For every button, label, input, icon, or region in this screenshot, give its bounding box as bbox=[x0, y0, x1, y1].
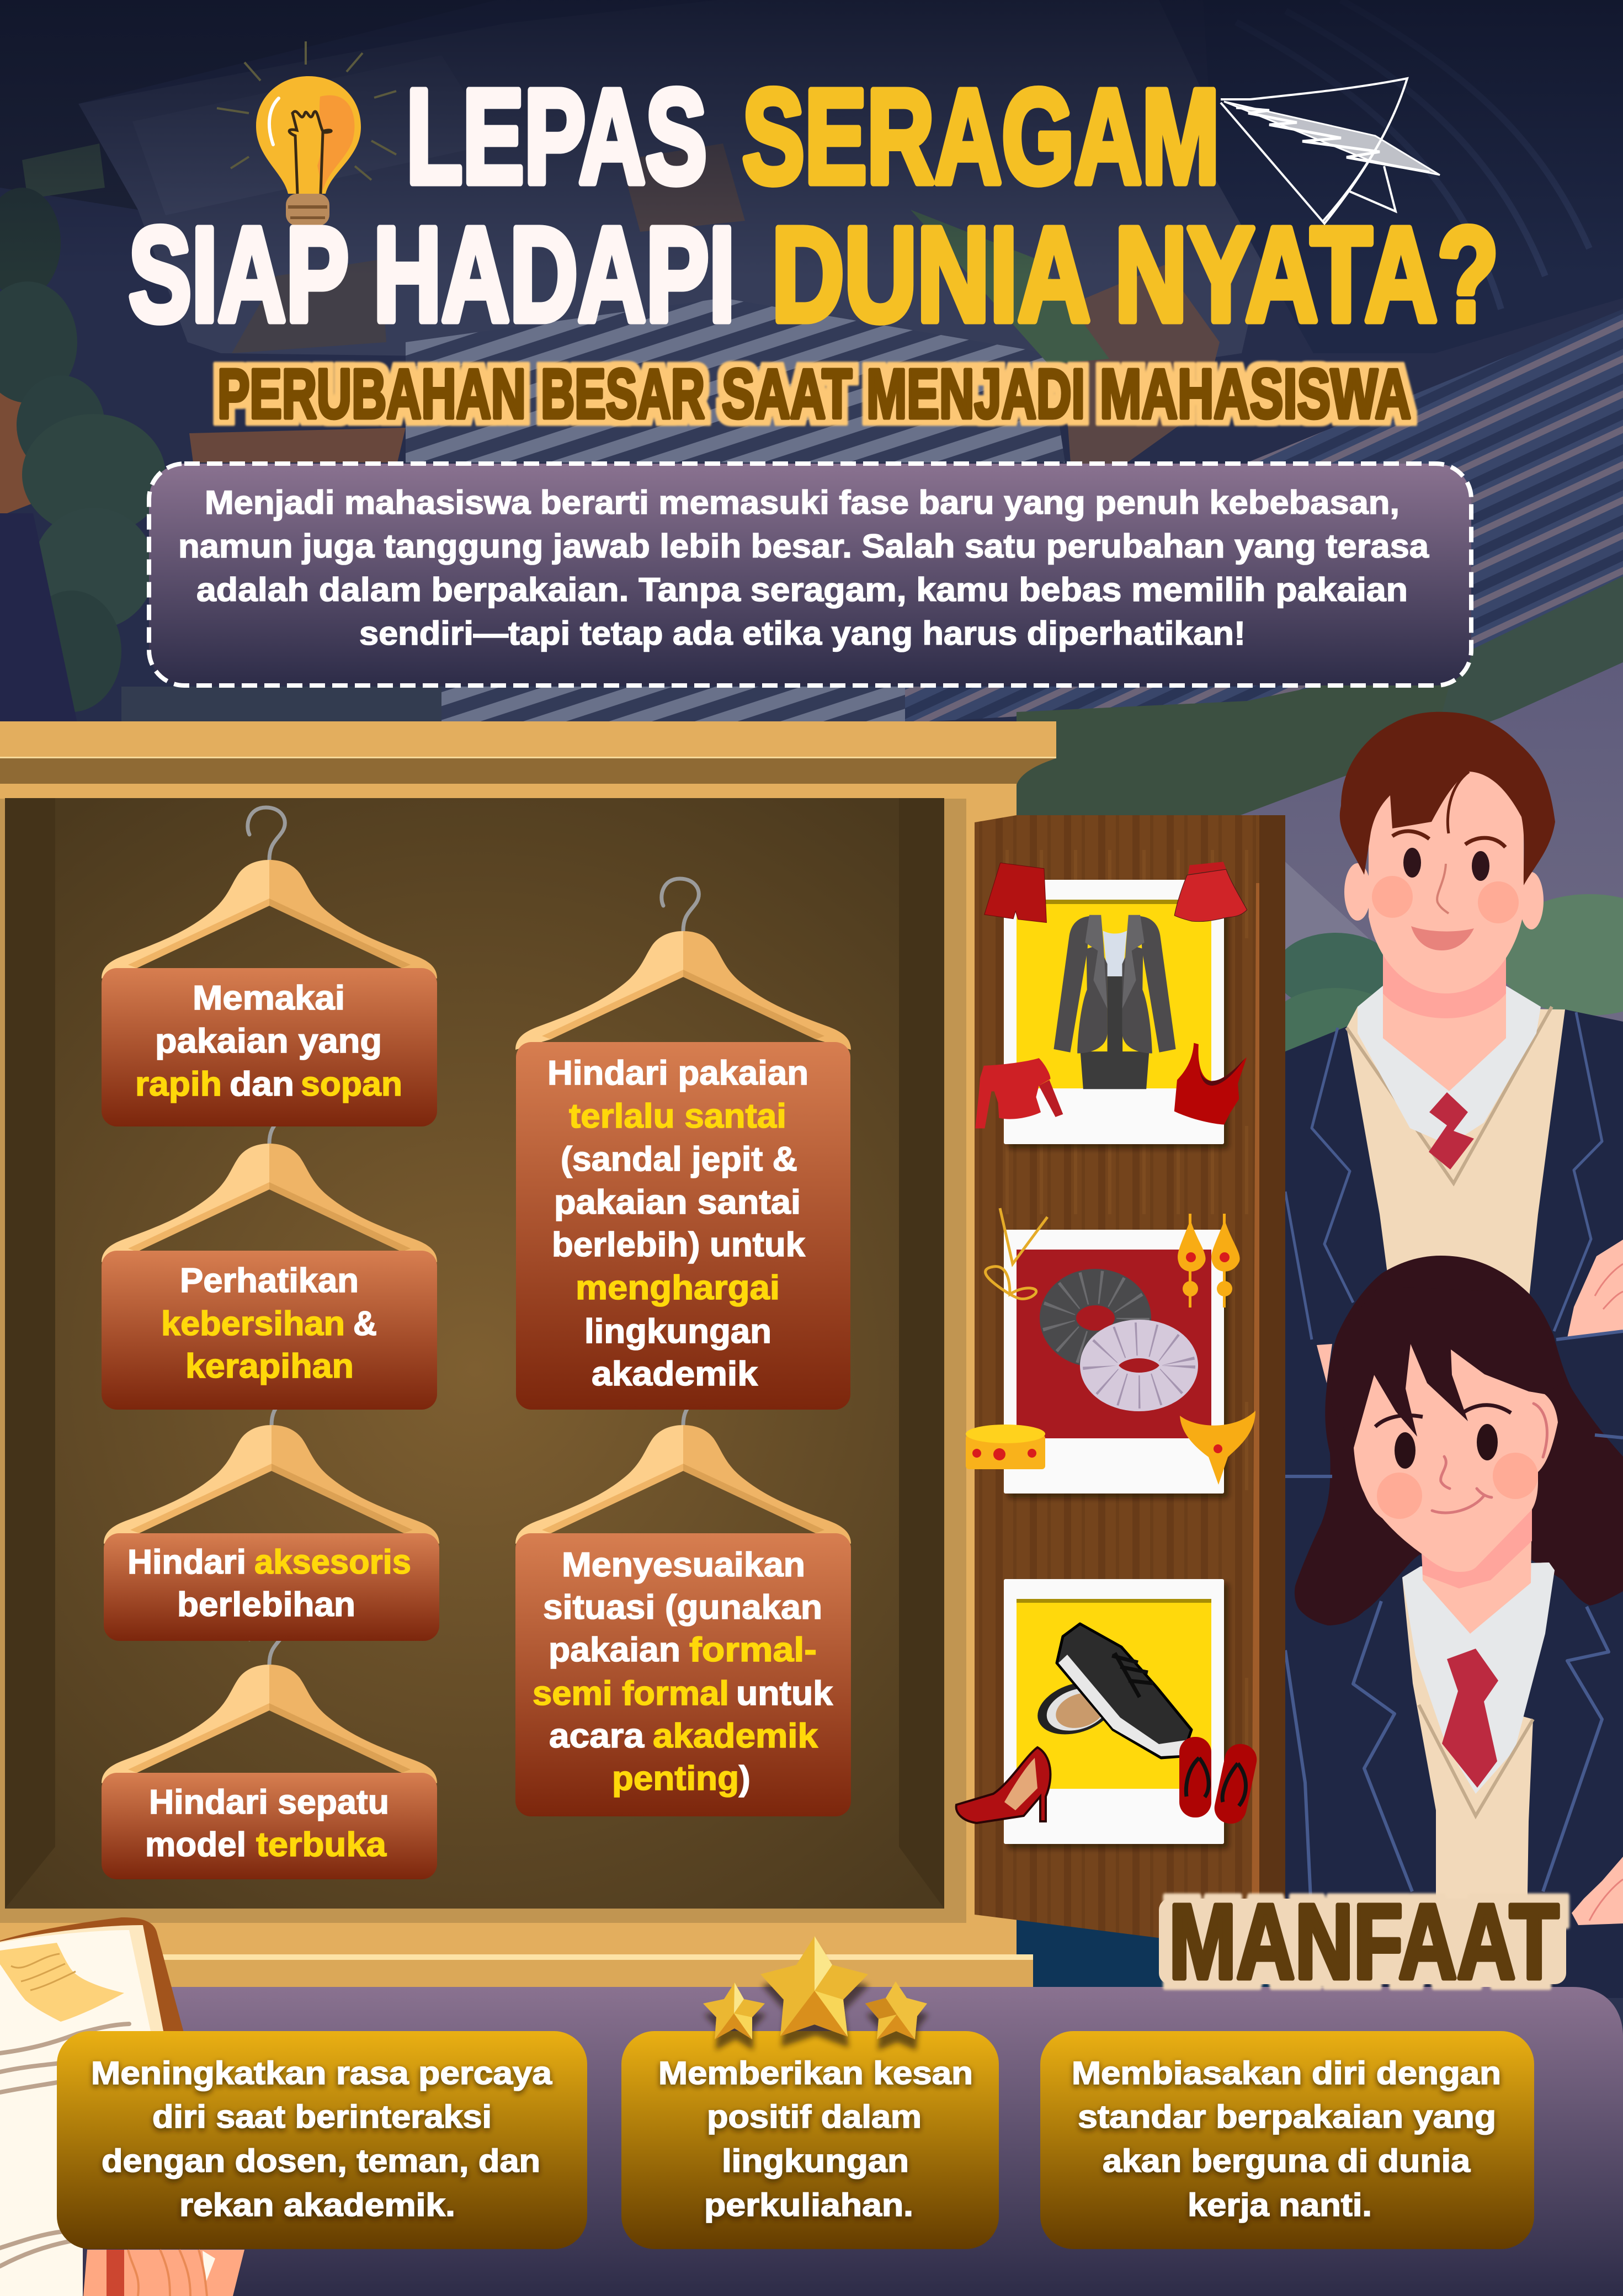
hanger sign: Hindari aksesoris berlebihan bbox=[104, 1373, 439, 1641]
panel: intro paragraph bbox=[149, 464, 1471, 685]
panel: intro paragraph: Menjadi mahasiswa berarti memasuki fase baru yang penuh kebebasan, bbox=[205, 484, 1399, 521]
girl student bbox=[1285, 1256, 1623, 1998]
boy student bbox=[1285, 712, 1623, 1998]
hanger sign: Hindari aksesoris berlebihan: aksesoris bbox=[254, 1543, 411, 1581]
polaroid: outfits bbox=[975, 862, 1247, 1144]
card: kesan positif bbox=[621, 2031, 999, 2249]
hanger sign: Hindari pakaian terlalu santai: terlalu santai bbox=[569, 1097, 786, 1135]
icon: open book and hand bbox=[0, 1917, 244, 2296]
hanger sign: Memakai pakaian yang rapih dan sopan: dan bbox=[230, 1065, 294, 1103]
hanger sign: Menyesuaikan situasi bbox=[515, 1373, 851, 1816]
icon: gold collar necklace bbox=[1180, 1411, 1255, 1485]
hanger sign: Menyesuaikan situasi: untuk bbox=[736, 1675, 833, 1713]
card: standar dunia kerja: akan berguna di dunia bbox=[1103, 2143, 1471, 2179]
icon: lilac scrunchie bbox=[1099, 1339, 1179, 1392]
subtitle: MENJADI bbox=[866, 355, 1085, 433]
card: kesan positif: perkuliahan. bbox=[704, 2187, 913, 2223]
hanger sign: Memakai pakaian yang rapih dan sopan: Memakai bbox=[193, 979, 345, 1017]
icon: grey scrunchie bbox=[1058, 1287, 1133, 1349]
card: percaya diri: Meningkatkan rasa percaya bbox=[91, 2055, 552, 2091]
hanger sign: Hindari pakaian terlalu santai: akademik bbox=[592, 1355, 758, 1393]
hanger sign: Perhatikan kebersihan dan kerapihan: & bbox=[353, 1305, 377, 1343]
subtitle: PERUBAHAN bbox=[217, 355, 526, 433]
hanger sign: Hindari pakaian terlalu santai: (sandal jepit & bbox=[561, 1140, 797, 1178]
hanger sign: Hindari pakaian terlalu santai: Hindari pakaian bbox=[547, 1054, 808, 1092]
hanger sign: Memakai pakaian yang rapih dan sopan: rapih bbox=[135, 1065, 222, 1103]
subtitle: BESAR bbox=[541, 355, 705, 433]
icon: three gold stars bbox=[703, 1936, 927, 2039]
hanger sign: Perhatikan kebersihan dan kerapihan bbox=[102, 1091, 437, 1410]
icon: red shorts bbox=[985, 863, 1046, 923]
subtitle: SAAT bbox=[722, 355, 852, 433]
polaroid: footwear bbox=[956, 1579, 1260, 1844]
hanger sign: Hindari pakaian terlalu santai: lingkungan bbox=[584, 1312, 771, 1351]
hanger sign: Perhatikan kebersihan dan kerapihan: Perhatikan bbox=[180, 1262, 359, 1300]
hanger sign: Perhatikan kebersihan dan kerapihan: kebersihan bbox=[161, 1305, 345, 1343]
icon: light bulb bbox=[217, 41, 396, 226]
hanger sign: Menyesuaikan situasi: situasi (gunakan bbox=[543, 1588, 822, 1627]
card: kesan positif: Memberikan kesan bbox=[658, 2055, 973, 2091]
panel: benefits background bbox=[0, 1987, 1623, 2296]
icon: red off-shoulder top bbox=[975, 1058, 1063, 1129]
hanger sign: Hindari pakaian terlalu santai bbox=[515, 879, 851, 1410]
hanger sign: Menyesuaikan situasi: pakaian bbox=[549, 1631, 680, 1669]
hanger sign: Menyesuaikan situasi: ) bbox=[739, 1760, 751, 1798]
hanger sign: Hindari aksesoris berlebihan: Hindari bbox=[127, 1543, 246, 1581]
wardrobe frame bbox=[0, 721, 1287, 1993]
hanger sign: Hindari aksesoris berlebihan: berlebihan bbox=[177, 1586, 355, 1624]
hanger sign: Perhatikan kebersihan dan kerapihan: kerapihan bbox=[185, 1347, 354, 1385]
card: standar dunia kerja: standar berpakaian yang bbox=[1078, 2099, 1496, 2135]
icon: black shoe bbox=[1057, 1624, 1191, 1758]
polaroid: accessories bbox=[966, 1208, 1255, 1494]
card: percaya diri: rekan akademik. bbox=[179, 2187, 455, 2223]
girl hand bbox=[1572, 1857, 1623, 1925]
hanger sign: Memakai pakaian yang rapih dan sopan: pakaian yang bbox=[155, 1022, 382, 1060]
icon: red high heels bbox=[956, 1747, 1050, 1823]
hanger sign: Menyesuaikan situasi: semi formal bbox=[533, 1675, 729, 1713]
title: SERAGAM bbox=[742, 62, 1220, 211]
icon: red flip flops bbox=[1179, 1737, 1260, 1826]
card: standar dunia kerja: kerja nanti. bbox=[1188, 2187, 1372, 2223]
icon: gold bangle bbox=[966, 1425, 1045, 1469]
wardrobe door bbox=[975, 815, 1285, 1954]
hanger sign: Hindari sepatu model terbuka: model bbox=[145, 1826, 246, 1864]
title: LEPAS bbox=[406, 62, 707, 211]
card: percaya diri: diri saat berinteraksi bbox=[152, 2099, 492, 2135]
panel: intro paragraph: namun juga tanggung jawab lebih besar. Salah satu perubahan yang terasa bbox=[178, 528, 1429, 565]
icon: red skirt bbox=[1174, 862, 1247, 922]
card: kesan positif: positif dalam bbox=[707, 2099, 922, 2135]
panel: intro paragraph: adalah dalam berpakaian. Tanpa seragam, kamu bebas memilih pakaian bbox=[196, 571, 1408, 608]
icon: gold earrings bbox=[1178, 1214, 1240, 1308]
hanger sign: Hindari pakaian terlalu santai: menghargai bbox=[576, 1269, 780, 1307]
card: standar dunia kerja bbox=[1040, 2031, 1534, 2249]
boy hand bbox=[1317, 1240, 1623, 1383]
icon: shoe sole bbox=[1031, 1673, 1121, 1744]
panel: intro paragraph: sendiri—tapi tetap ada etika yang harus diperhatikan! bbox=[359, 615, 1246, 652]
hanger sign: Menyesuaikan situasi: penting bbox=[612, 1760, 739, 1798]
hanger sign: Hindari sepatu model terbuka bbox=[102, 1612, 437, 1879]
card: percaya diri: dengan dosen, teman, dan bbox=[102, 2143, 540, 2179]
hanger sign: Menyesuaikan situasi: acara bbox=[549, 1717, 645, 1755]
icon: paper plane bbox=[1221, 78, 1440, 224]
hanger sign: Menyesuaikan situasi: formal- bbox=[689, 1631, 817, 1669]
icon: red crop top bbox=[1174, 1043, 1247, 1125]
hanger sign: Hindari pakaian terlalu santai: pakaian santai bbox=[554, 1183, 801, 1221]
subtitle bbox=[217, 355, 1411, 433]
hanger sign: Memakai pakaian yang rapih dan sopan: sopan bbox=[301, 1065, 402, 1103]
title: SIAP HADAPI bbox=[129, 200, 735, 349]
hanger sign: Menyesuaikan situasi: Menyesuaikan bbox=[562, 1546, 805, 1584]
icon: blazer and skirt outfit bbox=[1053, 915, 1176, 1089]
card: percaya diri bbox=[57, 2031, 587, 2249]
title bbox=[129, 62, 1499, 349]
subtitle: MAHASISWA bbox=[1100, 355, 1411, 433]
hanger sign: Hindari sepatu model terbuka: Hindari sepatu bbox=[149, 1783, 389, 1821]
hanger sign: Hindari sepatu model terbuka: terbuka bbox=[256, 1826, 387, 1864]
card: standar dunia kerja: Membiasakan diri dengan bbox=[1072, 2055, 1501, 2091]
hanger sign: Memakai pakaian yang rapih dan sopan bbox=[102, 807, 437, 1126]
icon: heart necklace bbox=[986, 1208, 1047, 1299]
hanger sign: Hindari pakaian terlalu santai: berlebih) untuk bbox=[552, 1226, 806, 1264]
background: aerial campus photo, navy tint bbox=[0, 0, 1623, 1076]
card: kesan positif: lingkungan bbox=[722, 2143, 909, 2179]
hanger sign: Menyesuaikan situasi: akademik bbox=[653, 1717, 818, 1755]
